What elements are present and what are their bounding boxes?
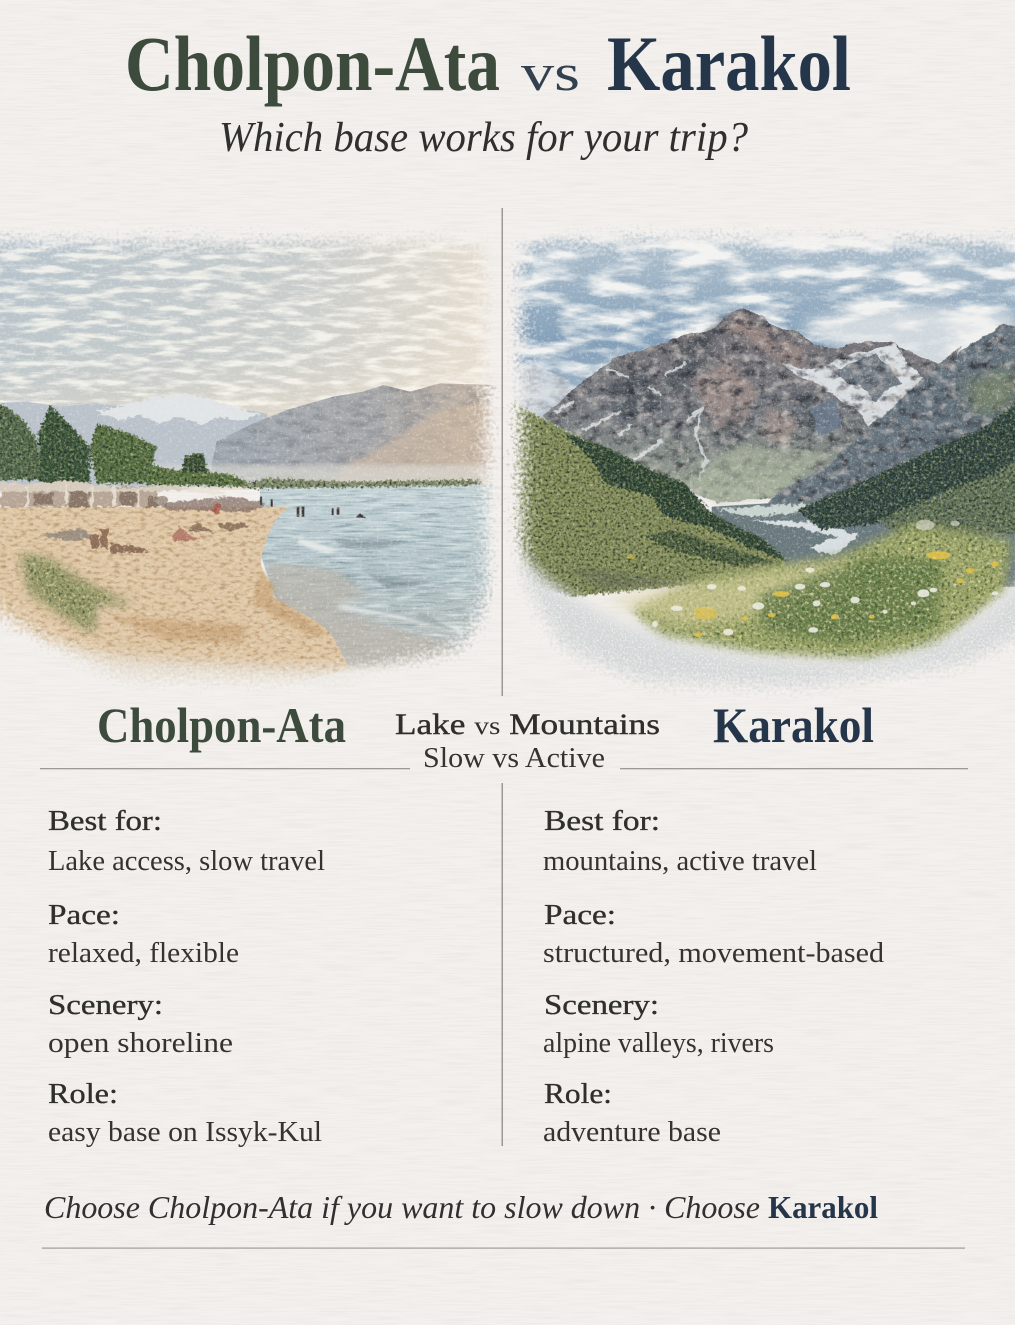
far snowy mountains	[0, 394, 287, 487]
vertical divider: images	[502, 208, 503, 696]
left grassy hillside	[495, 390, 788, 597]
foreground pale sand	[35, 639, 447, 695]
main peak	[542, 307, 962, 503]
right mountain flank	[768, 324, 1015, 504]
sandy beach	[0, 507, 350, 700]
Pace	[48, 899, 239, 969]
beach huts and umbrellas	[0, 481, 267, 513]
rock and snow streaks	[555, 364, 842, 480]
Role: Role:	[48, 1078, 118, 1110]
Best for	[48, 805, 325, 877]
Scenery: Scenery:	[544, 989, 659, 1021]
Best for	[543, 805, 817, 877]
title: vs: vs	[521, 45, 580, 102]
dark rock shadows	[605, 307, 835, 450]
panel: Karakol mountain scene	[492, 220, 1015, 710]
header rule	[40, 768, 968, 769]
title	[125, 20, 851, 107]
near mountain ridge	[150, 383, 520, 487]
sunlit rock facets	[692, 315, 805, 447]
Best for: mountains, active travel	[543, 846, 817, 877]
Best for: Best for:	[48, 805, 162, 837]
Lake vs Mountains: Lake vs Mountains	[395, 708, 660, 741]
Role: Role:	[544, 1078, 612, 1110]
sky	[495, 220, 1015, 497]
panel: Cholpon-Ata facts	[48, 805, 325, 1148]
sunbathers and swimmers	[43, 523, 250, 553]
heading: Cholpon-Ata: Cholpon-Ata	[97, 697, 346, 753]
trees	[0, 400, 480, 489]
sky	[0, 220, 510, 490]
vertical divider: columns	[502, 783, 503, 1146]
panel: Cholpon-Ata beach scene	[0, 220, 520, 707]
exposed ridge in glacier	[833, 353, 902, 402]
wildflower meadow	[605, 520, 1012, 660]
closing line: Karakol	[768, 1189, 878, 1225]
paper grain over scenes	[0, 225, 1015, 695]
subtitle: Which base works for your trip?	[219, 115, 748, 161]
Role	[48, 1078, 322, 1148]
valley floor and river	[712, 500, 1015, 587]
shore shadow	[110, 573, 330, 643]
distant snowy peaks	[512, 365, 574, 423]
Scenery	[543, 989, 774, 1059]
dark conifer slope	[798, 397, 1015, 530]
Best for: Best for:	[544, 805, 660, 837]
green lower slope right	[878, 453, 1015, 540]
Scenery: Scenery:	[48, 989, 163, 1021]
panel: Karakol facts	[543, 805, 884, 1148]
lake	[260, 485, 513, 670]
glacier	[782, 343, 923, 427]
footer rule	[42, 1248, 965, 1249]
Slow vs Active: Slow vs Active	[423, 742, 605, 774]
dune grass	[20, 553, 133, 633]
title: Karakol: Karakol	[607, 20, 851, 107]
Pace: structured, movement-based	[543, 938, 884, 969]
closing line: Choose Cholpon-Ata if you want to slow down · Choose	[44, 1189, 760, 1225]
flowers	[628, 551, 999, 637]
Scenery	[48, 989, 233, 1059]
title: Cholpon-Ata: Cholpon-Ata	[125, 20, 500, 107]
Pace: relaxed, flexible	[48, 938, 239, 969]
Role: adventure base	[543, 1117, 721, 1148]
Pace: Pace:	[544, 899, 616, 931]
Scenery: open shoreline	[48, 1028, 233, 1059]
people in the water	[260, 497, 367, 518]
misty foreground	[492, 520, 1015, 710]
conifer forest	[565, 433, 788, 562]
Scenery: alpine valleys, rivers	[543, 1028, 774, 1059]
heading: Karakol: Karakol	[713, 697, 874, 753]
Role	[543, 1078, 721, 1148]
Pace	[543, 899, 884, 969]
Pace: Pace:	[48, 899, 120, 931]
Role: easy base on Issyk-Kul	[48, 1117, 322, 1148]
center comparison text	[395, 708, 660, 774]
Best for: Lake access, slow travel	[48, 846, 325, 877]
